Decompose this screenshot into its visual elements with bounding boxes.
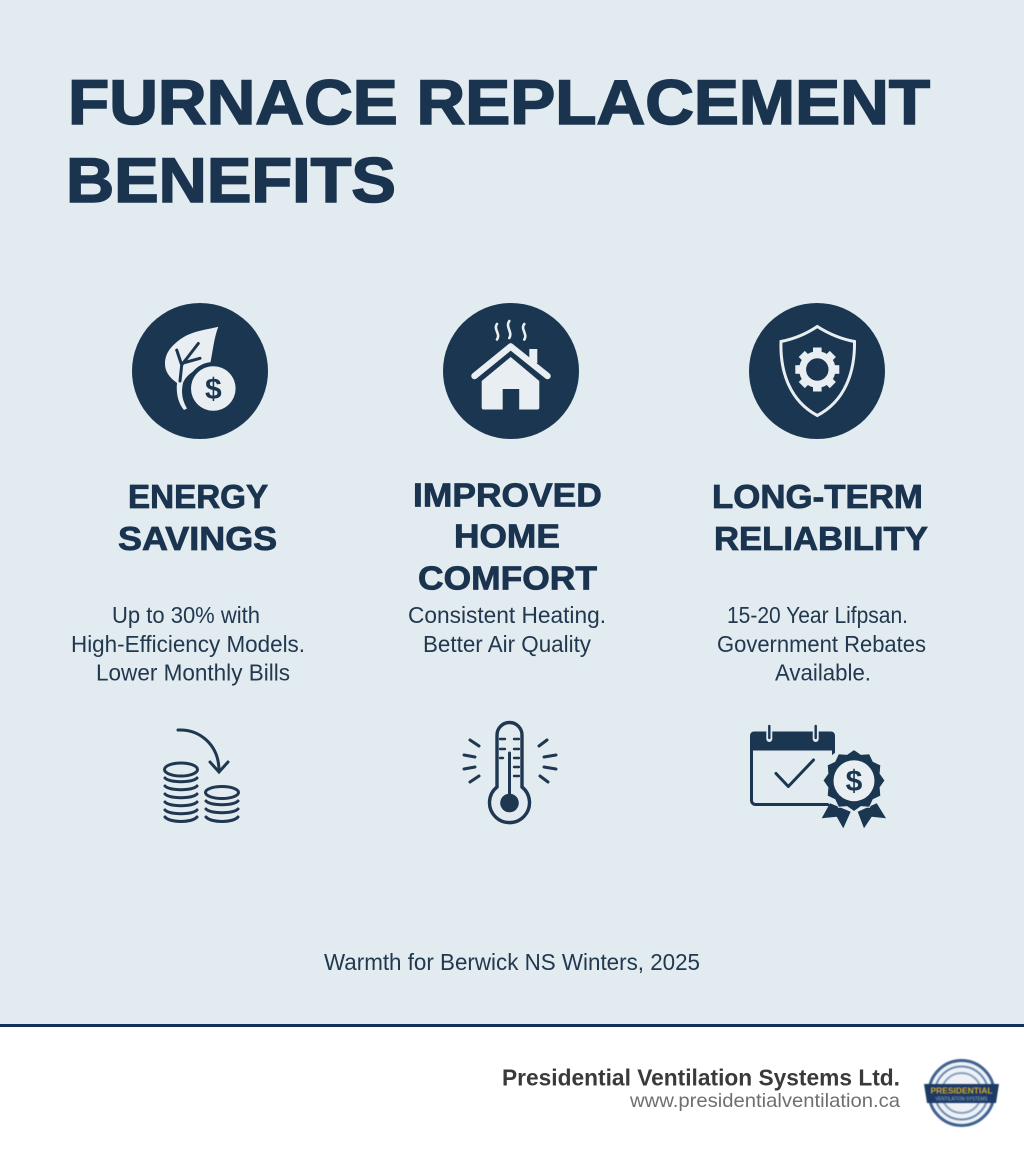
text: reliability details: Government Rebates: [717, 631, 926, 657]
caption: Warmth for Berwick NS Winters, 2025: [324, 949, 700, 975]
icon: calendar with rebate badge: [750, 726, 888, 828]
title: [66, 67, 930, 216]
icon: leaf and dollar coin: [132, 303, 268, 439]
text: energy savings details: High-Efficiency Models.: [71, 631, 305, 657]
heading: improved home comfort: HOME: [454, 519, 560, 555]
title: FURNACE REPLACEMENT: [68, 67, 930, 138]
heading: long-term reliability: RELIABILITY: [714, 521, 928, 558]
footer company name and website: www.presidentialventilation.ca: [629, 1090, 900, 1112]
icon: thermometer with rays: [464, 722, 556, 823]
text: home comfort details: Consistent Heating.: [408, 602, 606, 628]
text: reliability details: 15-20 Year Lifpsan.: [727, 602, 908, 628]
text: reliability details: Available.: [775, 660, 871, 686]
heading: improved home comfort: [413, 478, 602, 597]
text: home comfort details: [408, 602, 606, 657]
text: reliability details: [717, 602, 926, 686]
icon: coin stacks with down arrow: [164, 730, 238, 822]
text: energy savings details: Up to 30% with: [112, 602, 260, 628]
text: energy savings details: Lower Monthly Bills: [96, 660, 290, 686]
footer company name and website: Presidential Ventilation Systems Ltd.: [502, 1064, 900, 1090]
icon: calendar with rebate badge: $: [846, 765, 863, 798]
heading: improved home comfort: COMFORT: [418, 561, 597, 597]
footer company name and website: [502, 1064, 900, 1112]
heading: energy savings: ENERGY: [128, 479, 268, 516]
heading: long-term reliability: LONG-TERM: [712, 479, 923, 516]
icon: leaf and dollar coin: $: [205, 373, 222, 406]
title: BENEFITS: [66, 145, 396, 216]
logo badge: [924, 1060, 999, 1126]
icon: house with heat: [443, 303, 579, 439]
text: home comfort details: Better Air Quality: [423, 631, 591, 657]
text: energy savings details: [71, 602, 305, 686]
heading: long-term reliability: [712, 479, 928, 558]
heading: energy savings: SAVINGS: [118, 521, 277, 558]
icon: shield with gear: [749, 303, 885, 439]
logo badge: PRESIDENTIAL: [930, 1086, 993, 1096]
heading: improved home comfort: IMPROVED: [413, 478, 602, 514]
heading: energy savings: [118, 479, 277, 558]
logo badge: VENTILATION SYSTEMS: [936, 1096, 988, 1102]
